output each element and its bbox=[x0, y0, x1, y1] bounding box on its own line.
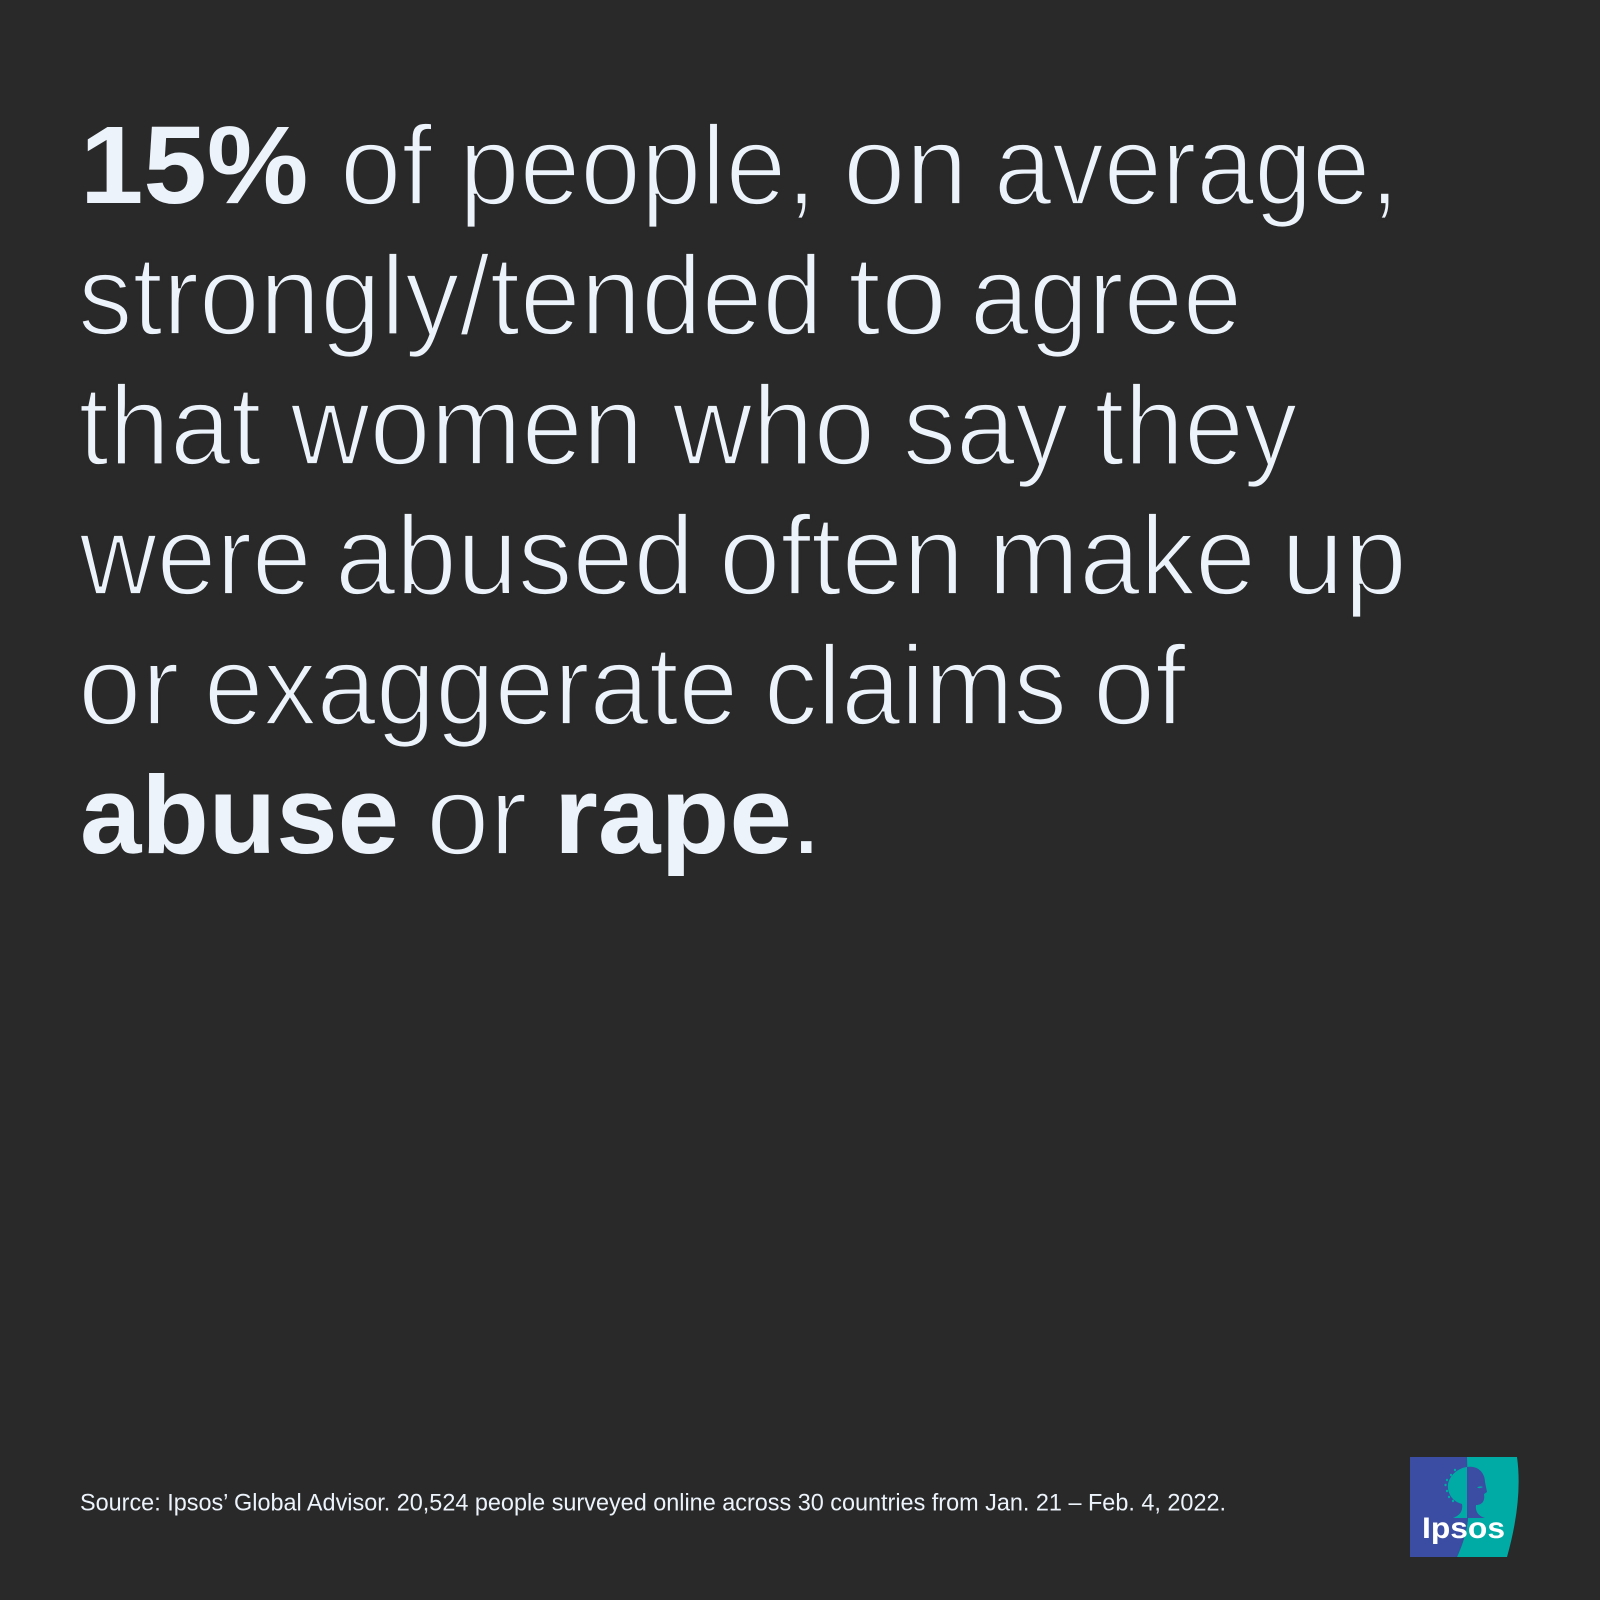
headline line 2: agree bbox=[970, 232, 1242, 358]
headline line 2: to bbox=[848, 232, 947, 358]
headline line 2 bbox=[78, 232, 1242, 358]
headline line 6: or bbox=[426, 752, 528, 878]
headline line 4: often bbox=[719, 492, 964, 618]
headline line 3: women bbox=[290, 362, 644, 488]
headline line 6: . bbox=[791, 754, 822, 877]
headline line 6 bbox=[80, 752, 822, 878]
icon: Ipsos logo bbox=[1410, 1457, 1519, 1557]
logo head bbox=[1467, 1467, 1487, 1518]
headline line 3: that bbox=[78, 362, 262, 488]
headline line 4: abused bbox=[335, 492, 694, 618]
headline line 1: of bbox=[340, 102, 433, 228]
headline line 2: strongly/tended bbox=[78, 232, 823, 358]
headline line 5 bbox=[78, 622, 1187, 748]
headline line 4 bbox=[79, 492, 1407, 618]
logo wordmark: Ipsos bbox=[1422, 1512, 1505, 1545]
headline line 4: were bbox=[79, 492, 311, 618]
headline line 3: say bbox=[903, 362, 1069, 488]
headline line 3: they bbox=[1094, 362, 1298, 488]
headline line 6: rape bbox=[554, 754, 792, 877]
headline line 4: make bbox=[988, 492, 1256, 618]
headline line 1: average, bbox=[994, 102, 1399, 228]
headline line 1: people, bbox=[459, 102, 816, 228]
headline line 1: 15% bbox=[80, 104, 308, 227]
headline line 5: of bbox=[1093, 622, 1187, 748]
headline line 3: who bbox=[672, 362, 875, 488]
headline line 6: abuse bbox=[80, 754, 399, 877]
headline line 5: claims bbox=[764, 622, 1067, 748]
headline line 1: on bbox=[843, 102, 968, 228]
logo tree bbox=[1444, 1467, 1467, 1518]
headline line 4: up bbox=[1281, 492, 1407, 618]
headline line 1 bbox=[80, 102, 1399, 228]
headline line 3 bbox=[78, 362, 1298, 488]
headline bbox=[78, 102, 1407, 878]
source note: Source: Ipsos’ Global Advisor. 20,524 people surveyed online across 30 countries from Jan. 21 – Feb. 4, 2022. bbox=[80, 1490, 1226, 1516]
headline line 5: exaggerate bbox=[204, 622, 738, 748]
headline line 5: or bbox=[78, 622, 180, 748]
